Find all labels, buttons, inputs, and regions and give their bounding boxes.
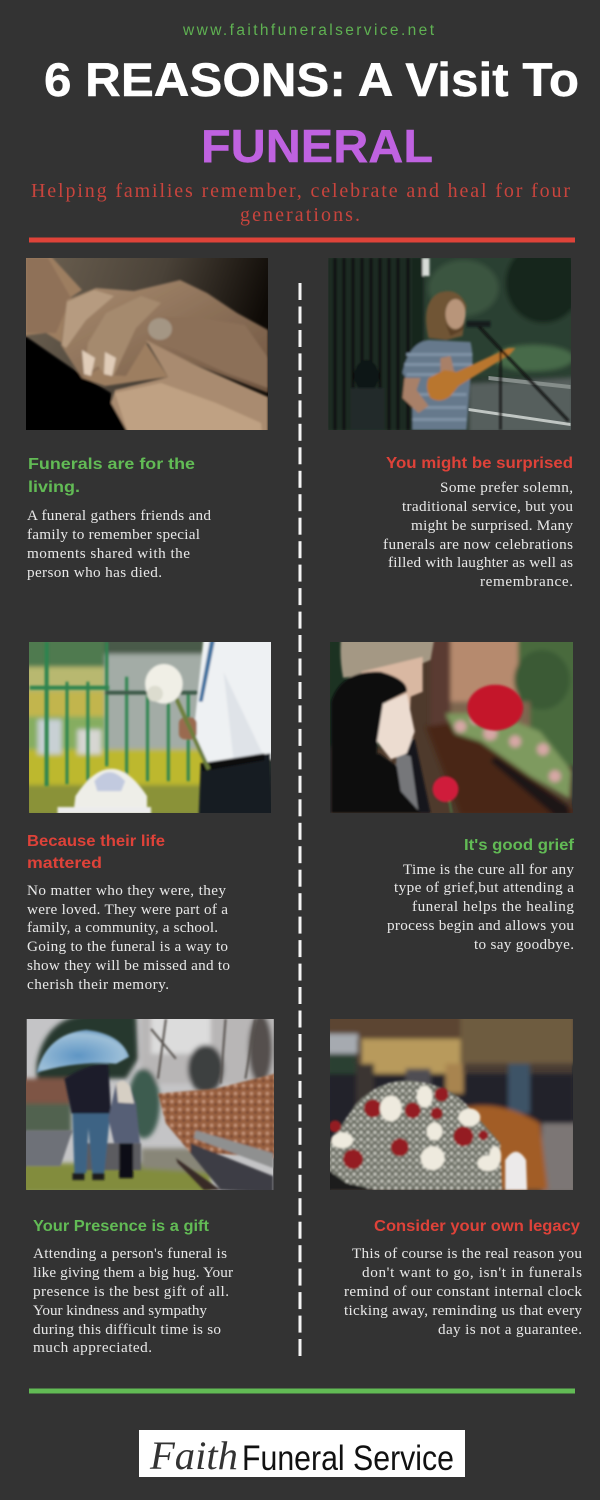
- body text: Time is the cure all for any: [403, 861, 574, 878]
- logo: Faith Funeral Service: [139, 1430, 465, 1478]
- body text: remembrance.: [480, 573, 573, 590]
- body text: might be surprised. Many: [411, 517, 573, 534]
- logo: Faith Funeral Service: Funeral Service: [242, 1439, 454, 1478]
- body text: to say goodbye.: [474, 936, 574, 953]
- body text: Your kindness and sympathy: [33, 1302, 207, 1319]
- body text: don't want to go, isn't in funerals: [362, 1264, 582, 1281]
- body text: show they will be missed and to: [27, 957, 230, 974]
- body text: like giving them a big hug. Your: [33, 1264, 233, 1281]
- body text: Some prefer solemn,: [440, 479, 573, 496]
- panel: because their life mattered: [25, 637, 273, 993]
- body text: funeral helps the healing: [412, 898, 574, 915]
- body text: day is not a guarantee.: [438, 1321, 582, 1338]
- photo: rose bouquet with crowd behind: [330, 1019, 573, 1190]
- panel: consider your own legacy: [326, 1014, 582, 1338]
- heading: living.: [28, 479, 80, 496]
- website url: www.faithfuneralservice.net: [182, 22, 435, 39]
- title: 6 REASONS: A Visit To: [44, 53, 579, 106]
- heading: mattered: [27, 855, 102, 872]
- photo: mourners beside casket: [330, 642, 573, 813]
- body text: [383, 479, 573, 590]
- body text: process begin and allows you: [387, 917, 574, 934]
- body text: person who has died.: [27, 564, 162, 581]
- body text: traditional service, but you: [402, 498, 573, 515]
- body text: type of grief,but attending a: [394, 879, 574, 896]
- heading: [28, 456, 195, 496]
- body text: [27, 882, 230, 993]
- body text: A funeral gathers friends and: [27, 507, 211, 524]
- title: FUNERAL: [201, 120, 433, 172]
- body text: were loved. They were part of a: [27, 901, 228, 918]
- heading: Consider your own legacy: [374, 1218, 580, 1235]
- body text: [33, 1245, 233, 1356]
- heading: [27, 833, 165, 872]
- subtitle: Helping families remember, celebrate and heal for four: [31, 180, 570, 202]
- divider: red: [29, 238, 575, 242]
- panel: your presence is a gift: [22, 1014, 275, 1356]
- body text: family to remember special: [27, 526, 200, 543]
- panel: funerals are for the living: [21, 253, 268, 581]
- body text: Going to the funeral is a way to: [27, 938, 228, 955]
- body text: This of course is the real reason you: [352, 1245, 582, 1262]
- body text: moments shared with the: [27, 545, 190, 562]
- body text: cherish their memory.: [27, 976, 169, 993]
- body text: remind of our constant internal clock: [344, 1283, 582, 1300]
- photo: holding hands: [26, 258, 268, 430]
- panel: you might be surprised: [328, 243, 582, 590]
- body text: filled with laughter as well as: [388, 554, 573, 571]
- body text: No matter who they were, they: [27, 882, 226, 899]
- divider: green: [29, 1388, 575, 1394]
- photo: man holding flowers at cemetery: [29, 642, 271, 813]
- heading: Because their life: [27, 833, 165, 850]
- body text: [344, 1245, 582, 1338]
- heading: You might be surprised: [386, 455, 573, 472]
- heading: Funerals are for the: [28, 456, 195, 473]
- subtitle: [31, 180, 570, 226]
- photo: musician with ukulele: [328, 258, 571, 430]
- body text: much appreciated.: [33, 1339, 152, 1356]
- heading: It's good grief: [464, 837, 575, 854]
- body text: during this difficult time is so: [33, 1321, 221, 1338]
- heading: Your Presence is a gift: [33, 1218, 210, 1235]
- center dashed divider: [298, 283, 302, 1356]
- panel: it's good grief: [326, 637, 578, 953]
- body text: [27, 507, 211, 581]
- logo: Faith Funeral Service: Faith: [149, 1433, 238, 1478]
- body text: presence is the best gift of all.: [33, 1283, 229, 1300]
- title: [44, 53, 579, 172]
- body text: ticking away, reminding us that every: [344, 1302, 582, 1319]
- body text: [387, 861, 574, 953]
- photo: man and girl under umbrella in cemetery: [26, 1019, 274, 1190]
- body text: family, a community, a school.: [27, 919, 218, 936]
- subtitle: generations.: [240, 204, 360, 226]
- body text: Attending a person's funeral is: [33, 1245, 227, 1262]
- body text: funerals are now celebrations: [383, 536, 573, 553]
